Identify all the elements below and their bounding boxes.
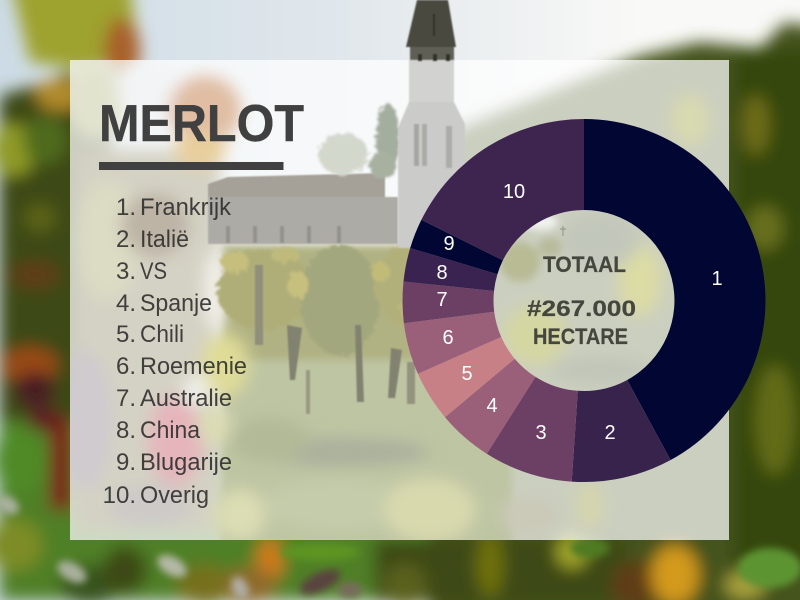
country list: Australie	[140, 385, 232, 412]
segment number labels: 7	[436, 289, 448, 311]
segment 6: Roemenie	[404, 312, 501, 374]
segment number labels: 2	[604, 422, 616, 444]
church tower through panel	[398, 60, 465, 248]
donut centre total: TOTAAL	[543, 252, 626, 277]
segment number labels: 5	[461, 363, 473, 385]
country list: Spanje	[140, 290, 212, 317]
title: MERLOT: MERLOT	[99, 95, 304, 153]
country list: 1.	[116, 194, 136, 221]
segment 10: Overig	[421, 119, 584, 260]
yellow highlights and hole detail	[214, 94, 710, 542]
country list: 8.	[116, 417, 136, 444]
country list: 9.	[116, 449, 136, 476]
country list: 7.	[116, 385, 136, 412]
segment 5: Chili	[418, 337, 515, 417]
segment number labels: 4	[486, 395, 498, 417]
segment number labels: 10	[503, 181, 525, 203]
donut chart	[402, 119, 765, 482]
church nave	[208, 173, 398, 244]
cross on distant spire	[560, 226, 566, 236]
segment 4: Spanje	[445, 359, 536, 454]
country list: Overig	[140, 482, 209, 509]
country list: 5.	[116, 321, 136, 348]
segment number labels	[436, 181, 723, 444]
donut centre total: #267.000	[527, 296, 636, 321]
segment 2: Italië	[572, 380, 671, 482]
vine foliage	[217, 245, 435, 355]
country list: 6.	[116, 353, 136, 380]
country list: China	[140, 417, 201, 444]
donut centre total: HECTARE	[533, 324, 628, 349]
segment 3: VS	[487, 377, 578, 482]
vine trunks and posts	[255, 265, 415, 414]
translucent white panel	[70, 60, 729, 540]
segment 7: Australie	[402, 282, 494, 323]
country list: Frankrijk	[140, 194, 232, 221]
country list: VS	[140, 258, 167, 285]
country list: Italië	[140, 226, 189, 253]
country list: 2.	[116, 226, 136, 253]
segment number labels: 3	[535, 422, 547, 444]
segment number labels: 9	[443, 233, 455, 255]
photo detail seen through the panel	[57, 60, 710, 545]
country list: 3.	[116, 258, 136, 285]
segment 1: Frankrijk	[584, 119, 765, 460]
segment number labels: 1	[711, 268, 723, 290]
segment number labels: 6	[442, 327, 454, 349]
donut centre total	[527, 252, 636, 349]
country list	[103, 194, 247, 509]
segment 9: Blugarije	[410, 220, 503, 274]
country list: 10.	[103, 482, 136, 509]
country list: Chili	[140, 321, 184, 348]
country list: Roemenie	[140, 353, 247, 380]
segment number labels: 8	[436, 262, 448, 284]
church spire above the panel	[406, 0, 456, 61]
trees behind the church	[318, 104, 400, 179]
country list: Blugarije	[140, 449, 232, 476]
country list: 4.	[116, 290, 136, 317]
segment 8: China	[404, 248, 497, 291]
title underline	[99, 162, 284, 170]
